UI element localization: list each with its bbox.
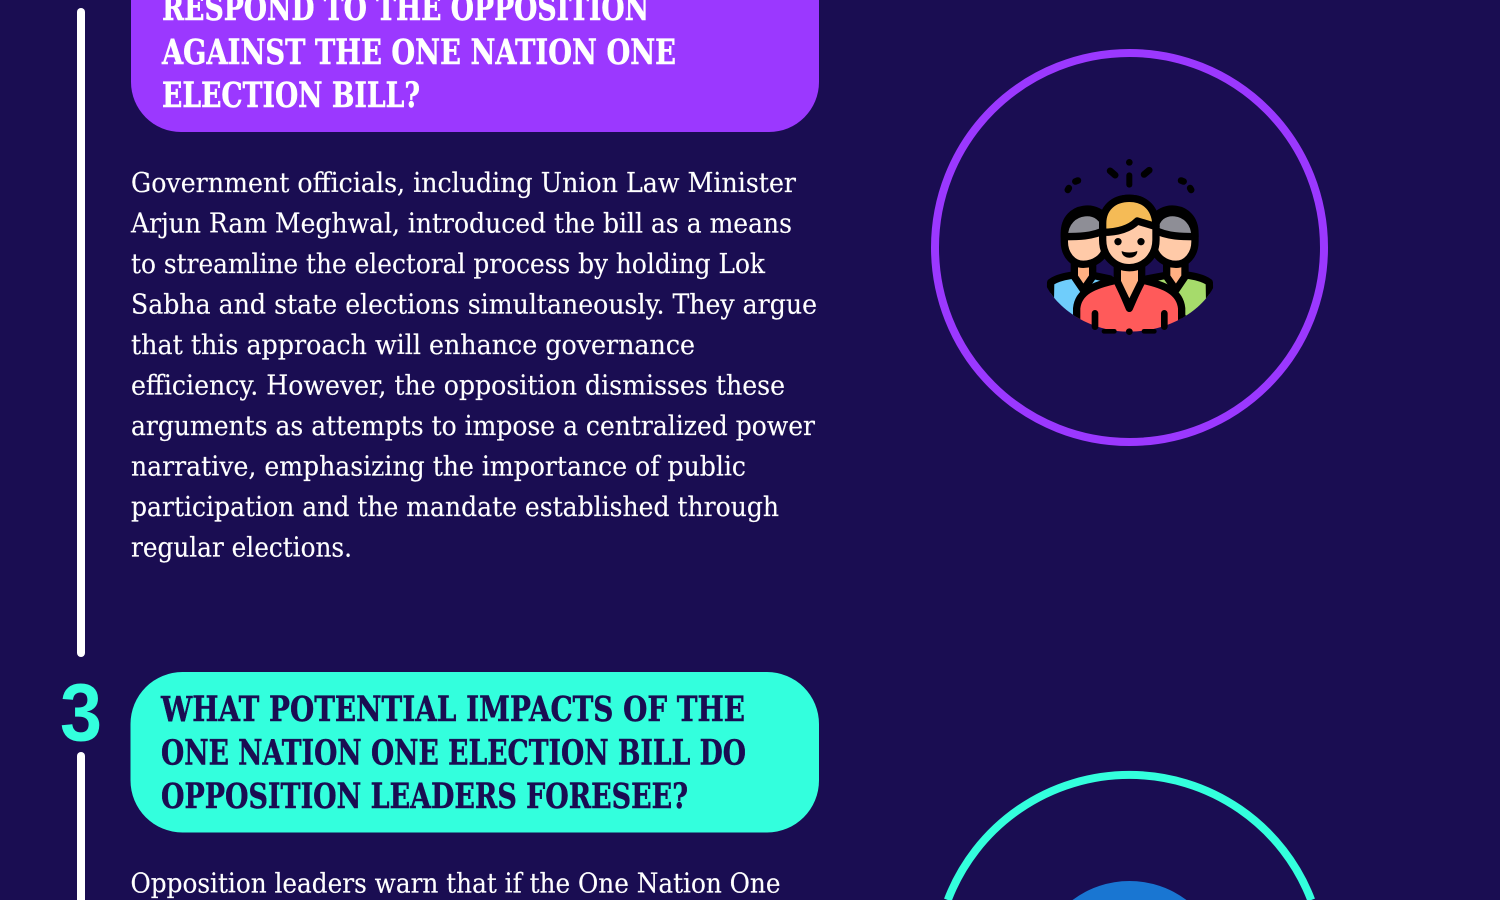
- icon: group of three people: [1050, 159, 1210, 345]
- body text: section 2: [130, 168, 817, 563]
- body text: section 2: Sabha and state elections simultaneously. They argue: [131, 289, 817, 320]
- timeline line: section 2: [77, 8, 85, 657]
- heading pill: section 2: AGAINST THE ONE NATION ONE: [161, 32, 676, 73]
- heading pill: section 3: WHAT POTENTIAL IMPACTS OF THE: [160, 689, 745, 730]
- heading pill: section 3: [130, 672, 819, 832]
- body text: section 2: narrative, emphasizing the importance of public: [131, 451, 746, 482]
- body text: section 2: to streamline the electoral process by holding Lok: [131, 249, 766, 280]
- body text: section 2: participation and the mandate established through: [131, 492, 779, 523]
- body text: section 2: efficiency. However, the opposition dismisses these: [131, 370, 785, 401]
- body text: section 2: regular elections.: [131, 532, 352, 563]
- body text: section 3: Opposition leaders warn that if the One Nation One: [130, 868, 780, 899]
- body text: section 2: that this approach will enhance governance: [131, 330, 695, 361]
- heading pill: section 2: [131, 0, 819, 132]
- body text: section 2: Government officials, including Union Law Minister: [131, 168, 796, 199]
- body text: section 2: arguments as attempts to impose a centralized power: [131, 411, 815, 442]
- heading pill: section 3: OPPOSITION LEADERS FORESEE?: [161, 776, 688, 817]
- section number 3: 3: [60, 668, 102, 758]
- icon circle: section 3: [948, 775, 1311, 900]
- icon: blue globe partial: [1072, 881, 1186, 900]
- body text: section 2: Arjun Ram Meghwal, introduced the bill as a means: [130, 208, 792, 239]
- heading pill: section 3: ONE NATION ONE ELECTION BILL DO: [161, 732, 746, 774]
- icon circle: section 2: [935, 53, 1324, 442]
- timeline line: section 3: [77, 752, 85, 900]
- heading pill: section 2: ELECTION BILL?: [162, 75, 420, 116]
